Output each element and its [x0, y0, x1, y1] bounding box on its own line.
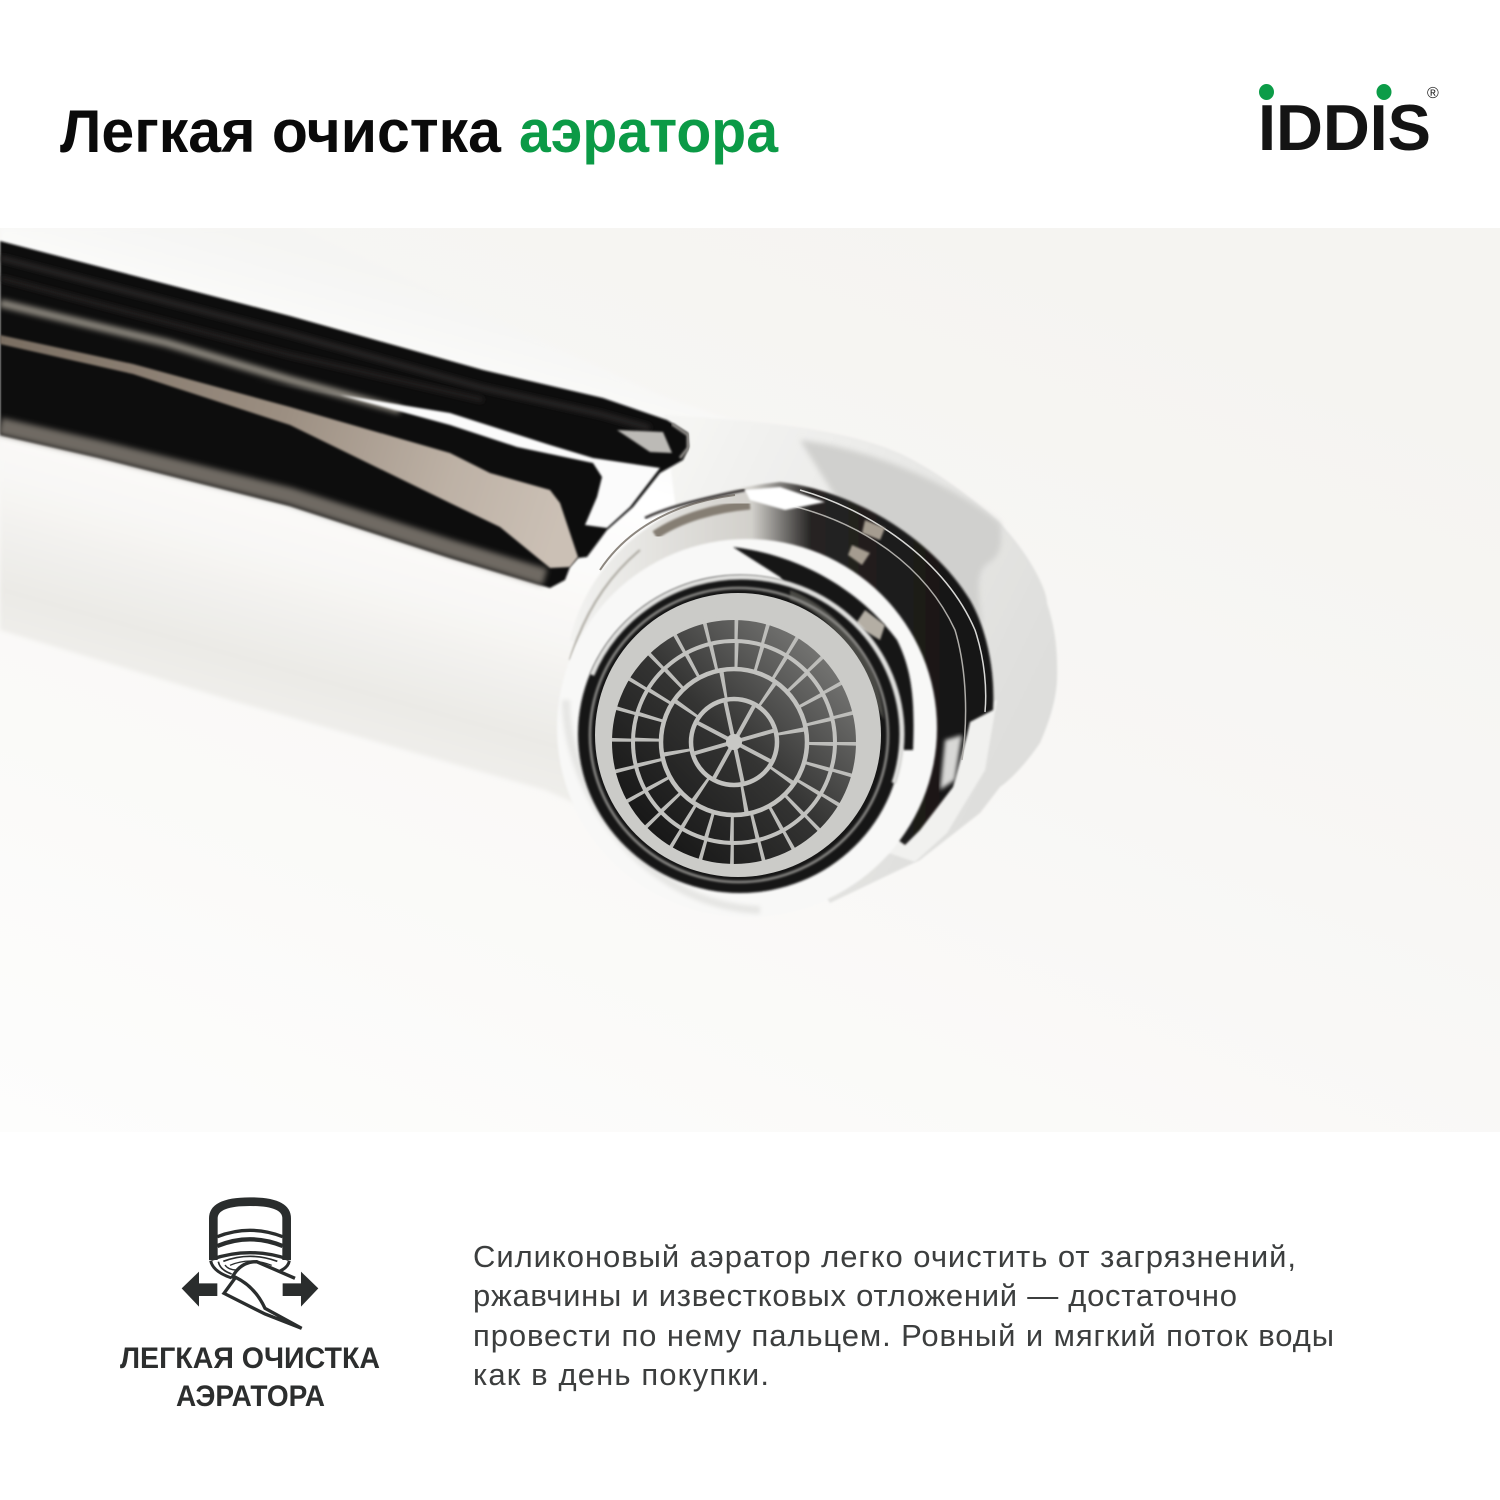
description text: ржавчины и известковых отложений — достаточно	[473, 1278, 1237, 1313]
logo: IDDIS: IDDIS	[1258, 91, 1431, 164]
aerator grille	[610, 618, 858, 866]
white chrome collar	[557, 539, 937, 917]
icon caption: АЭРАТОРА	[176, 1380, 325, 1413]
faucet head	[664, 415, 1057, 903]
aerator grey rim	[595, 593, 881, 877]
description text	[473, 1239, 1334, 1392]
panel: product photo of spout and aerator	[0, 228, 1500, 1132]
icon: finger cleaning aerator with arrows	[182, 1202, 318, 1328]
icon caption: ЛЕГКАЯ ОЧИСТКА	[120, 1342, 380, 1375]
logo: IDDIS: ®	[1427, 85, 1439, 102]
description text: Силиконовый аэратор легко очистить от загрязнений,	[473, 1239, 1296, 1274]
spout chrome reflection	[0, 241, 689, 588]
title	[60, 98, 779, 165]
spout body	[0, 470, 674, 800]
title: Легкая очистка	[60, 98, 502, 165]
black inner ring	[578, 575, 902, 893]
threaded chrome ring	[570, 482, 993, 845]
description text: провести по нему пальцем. Ровный и мягкий поток воды	[473, 1318, 1334, 1353]
title: аэратора	[519, 98, 779, 165]
icon caption	[120, 1342, 380, 1413]
description text: как в день покупки.	[473, 1357, 769, 1392]
